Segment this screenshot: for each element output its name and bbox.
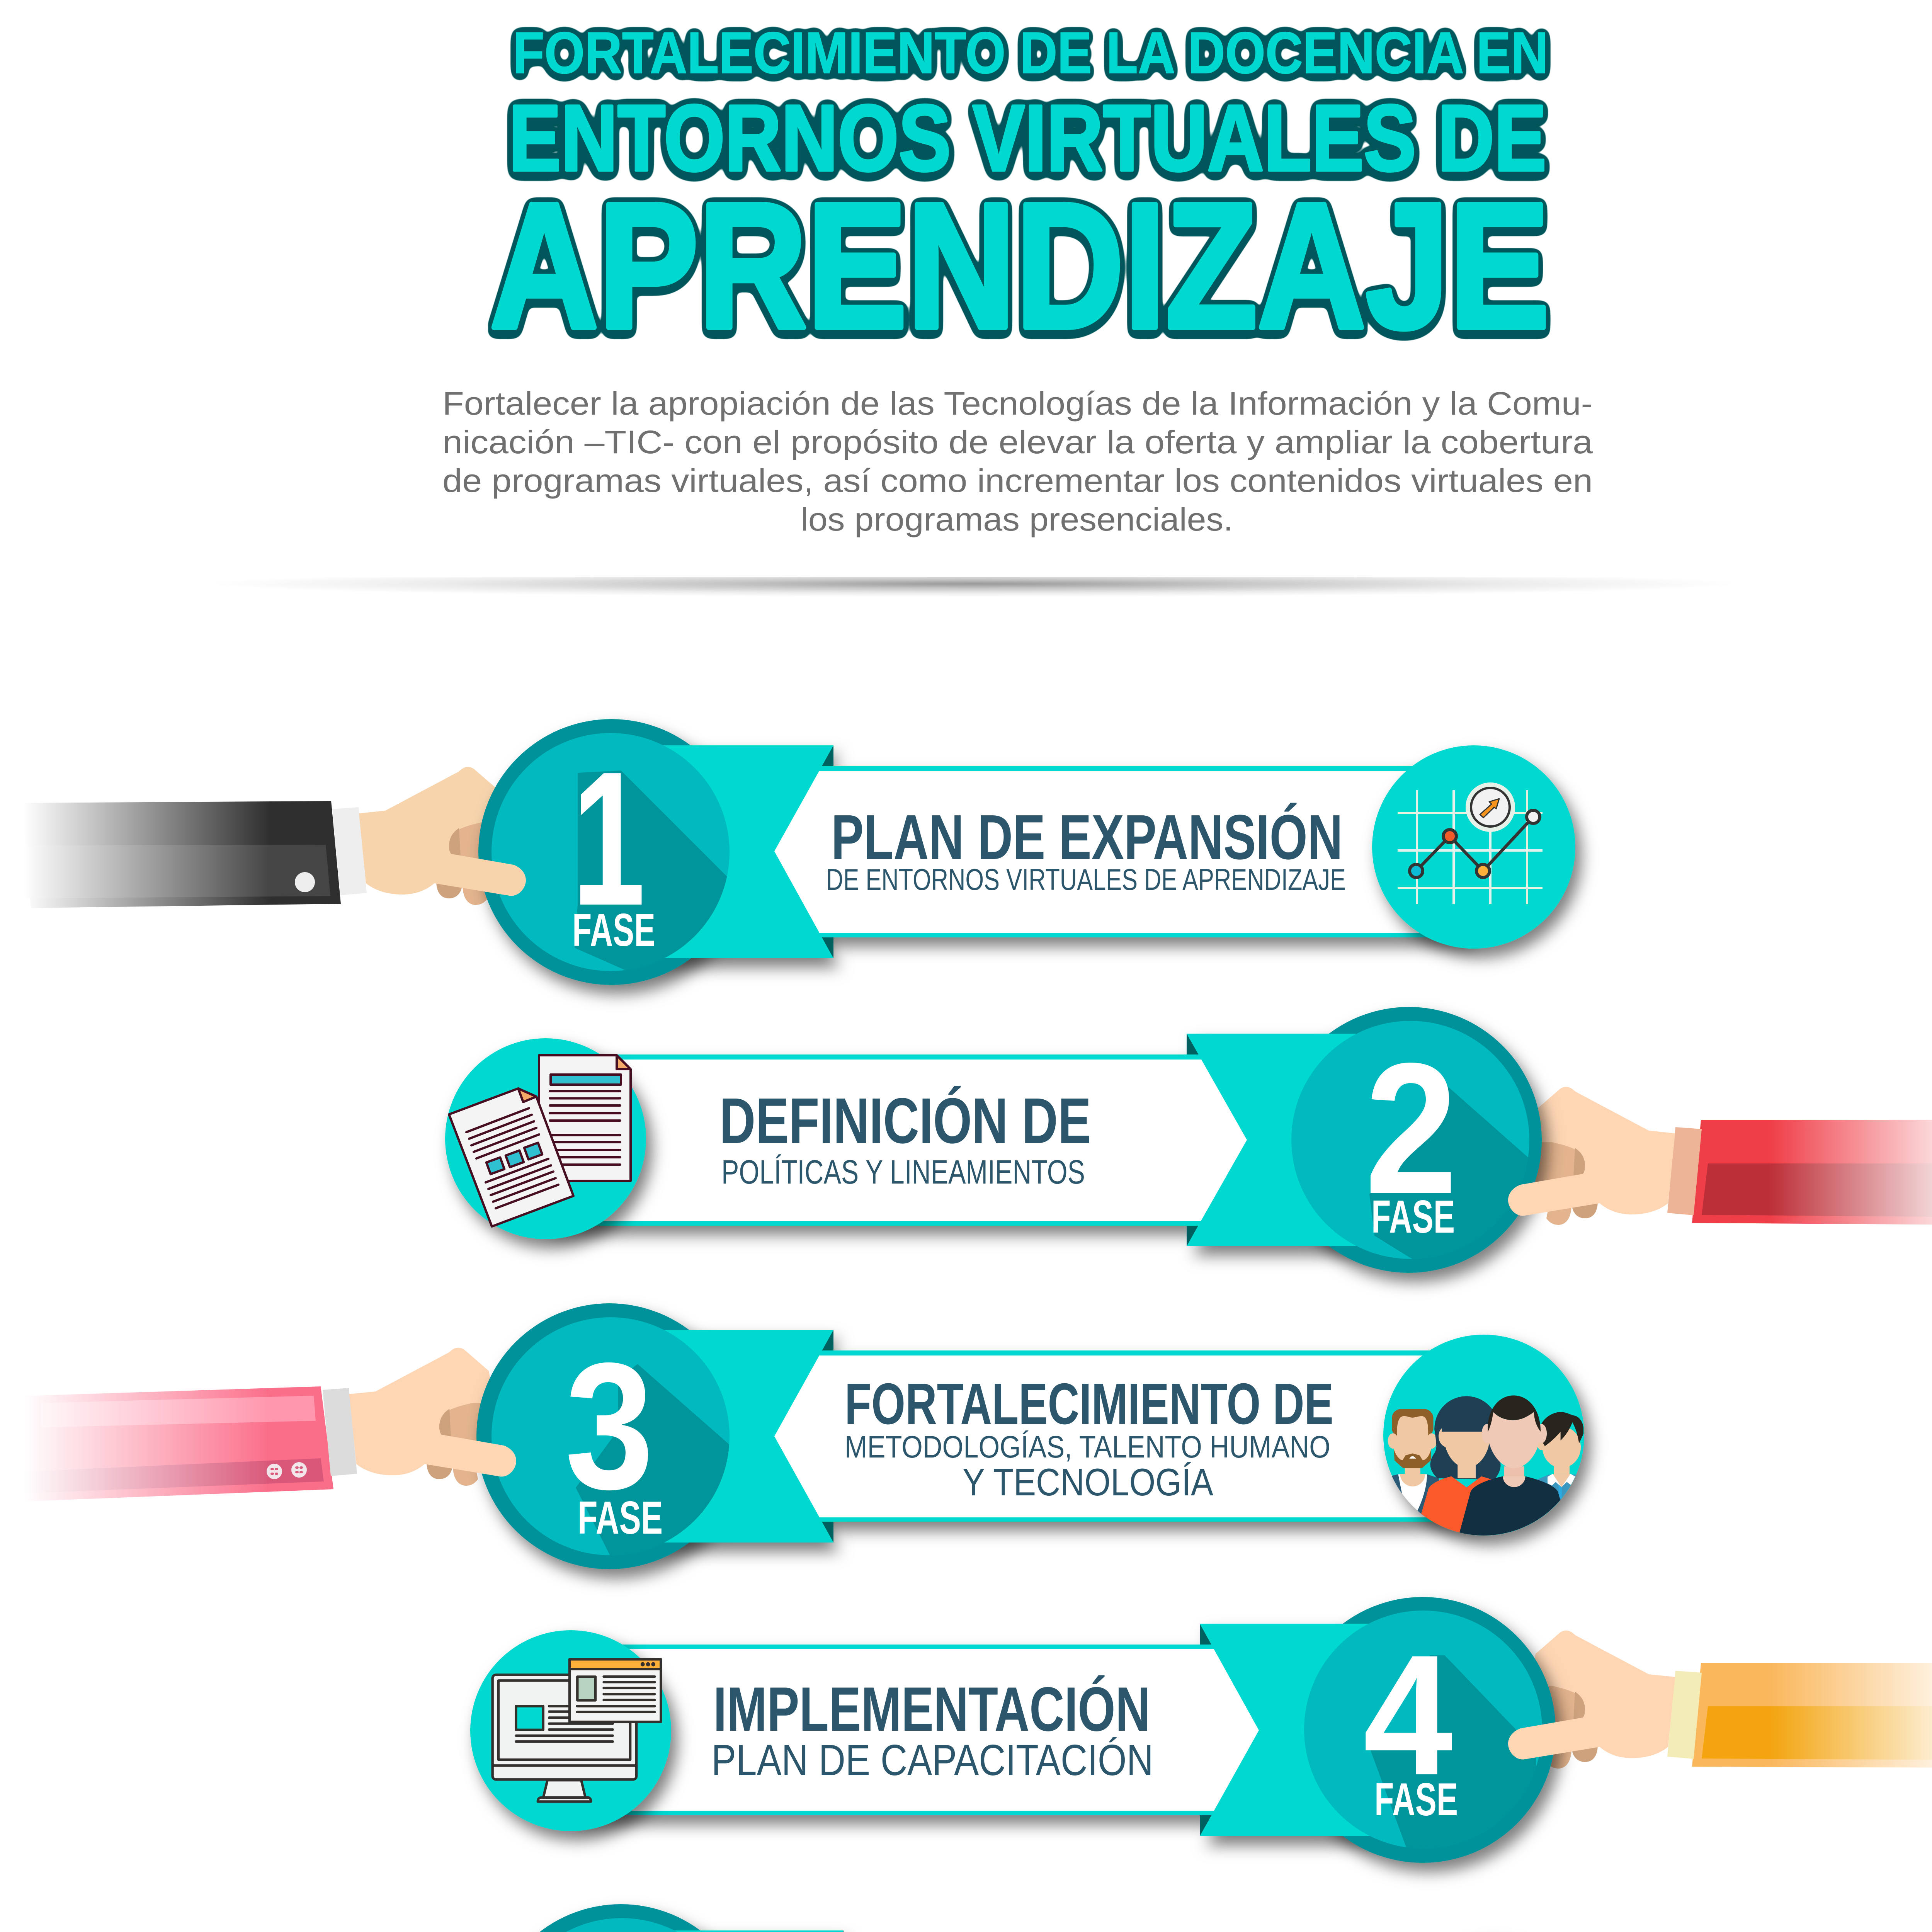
subheading: METODOLOGÍAS, TALENTO HUMANO (845, 1430, 1330, 1464)
fase label: FASE (578, 1492, 663, 1544)
number 3: 3 (565, 1325, 654, 1527)
hand (332, 767, 514, 905)
icon: team of four people (1388, 1395, 1583, 1543)
icon circle: chart (1372, 745, 1575, 949)
heading: FORTALECIMIENTO DE (845, 1371, 1333, 1436)
badge inner circle (492, 1317, 732, 1584)
badge inner circle (1304, 1611, 1542, 1862)
badge outer circle (478, 719, 744, 985)
fase label: FASE (1374, 1774, 1458, 1825)
subheading (845, 1430, 1330, 1503)
ribbon shadow (1187, 1034, 1409, 1246)
subheading: DE ENTORNOS VIRTUALES DE APRENDIZAJE (826, 862, 1346, 896)
pointing finger (1508, 1174, 1609, 1216)
ribbon shadow (611, 745, 833, 958)
number 4: 4 (1363, 1619, 1454, 1811)
ribbon band (715, 766, 1468, 937)
heading: DEFINICIÓN DE (719, 1085, 1091, 1157)
badge outer circle (476, 1303, 742, 1569)
phase 3 (0, 1303, 1584, 1584)
intro text (442, 385, 1593, 537)
icon circle: documents (445, 1038, 646, 1239)
badge inner circle (1291, 1021, 1536, 1275)
phase 4 (470, 1597, 1932, 1863)
hand (1520, 1087, 1702, 1225)
intro text: nicación –TIC- con el propósito de elevar la oferta y ampliar la cobertura (442, 424, 1593, 460)
title: ENTORNOS VIRTUALES DE (509, 86, 1546, 190)
number 2: 2 (1365, 1024, 1458, 1233)
icon circle: computer (470, 1630, 671, 1831)
icon: documents (449, 1055, 631, 1226)
ribbon shadow (611, 1330, 833, 1543)
subheading: POLÍTICAS Y LINEAMIENTOS (721, 1153, 1085, 1191)
ribbon shadow (621, 1930, 844, 1932)
intro text: los programas presenciales. (801, 501, 1233, 537)
ribbon band (572, 1645, 1314, 1815)
heading: IMPLEMENTACIÓN (713, 1674, 1150, 1744)
hand (1520, 1631, 1702, 1769)
ribbon (1200, 1624, 1423, 1836)
pointing finger (415, 1435, 516, 1476)
icon circle: people (1383, 1335, 1584, 1536)
sleeve: red (1692, 1113, 1932, 1229)
badge inner circle (492, 733, 732, 989)
fase label: FASE (1371, 1191, 1455, 1243)
ribbon band (546, 1054, 1299, 1226)
ribbon shadow (1200, 1624, 1423, 1836)
pointing finger (425, 854, 526, 896)
phase 1 (0, 719, 1575, 989)
hand (323, 1348, 504, 1486)
intro text: de programas virtuales, así como incrementar los contenidos virtuales en (442, 463, 1593, 499)
title: APRENDIZAJE (490, 166, 1549, 365)
subheading: Y TECNOLOGÍA (963, 1461, 1213, 1503)
badge inner circle (503, 1918, 742, 1932)
icon: computer and window (493, 1659, 661, 1801)
title (490, 20, 1549, 365)
phase 2 (445, 1007, 1932, 1275)
title: FORTALECIMIENTO DE LA DOCENCIA EN (513, 20, 1548, 86)
ribbon (621, 1930, 844, 1932)
ribbon (611, 1330, 833, 1543)
sleeve: black (0, 796, 341, 912)
sleeve: orange (1692, 1658, 1932, 1774)
divider shadow (209, 577, 1739, 604)
pointing finger (1508, 1718, 1609, 1759)
sleeve: pink (0, 1379, 333, 1507)
badge outer circle (1276, 1007, 1542, 1273)
ribbon band (715, 1350, 1480, 1522)
ribbon (1187, 1034, 1409, 1246)
intro text: Fortalecer la apropiación de las Tecnologías de la Información y la Comu- (442, 385, 1593, 422)
number 1: 1 (572, 732, 645, 945)
ribbon (611, 745, 833, 958)
heading: PLAN DE EXPANSIÓN (831, 802, 1343, 872)
subheading: PLAN DE CAPACITACIÓN (711, 1736, 1153, 1784)
badge outer circle (488, 1904, 754, 1932)
badge outer circle (1290, 1597, 1556, 1863)
phase 5 (0, 1904, 1588, 1932)
fase label: FASE (572, 904, 655, 956)
icon: line chart (1398, 782, 1543, 904)
